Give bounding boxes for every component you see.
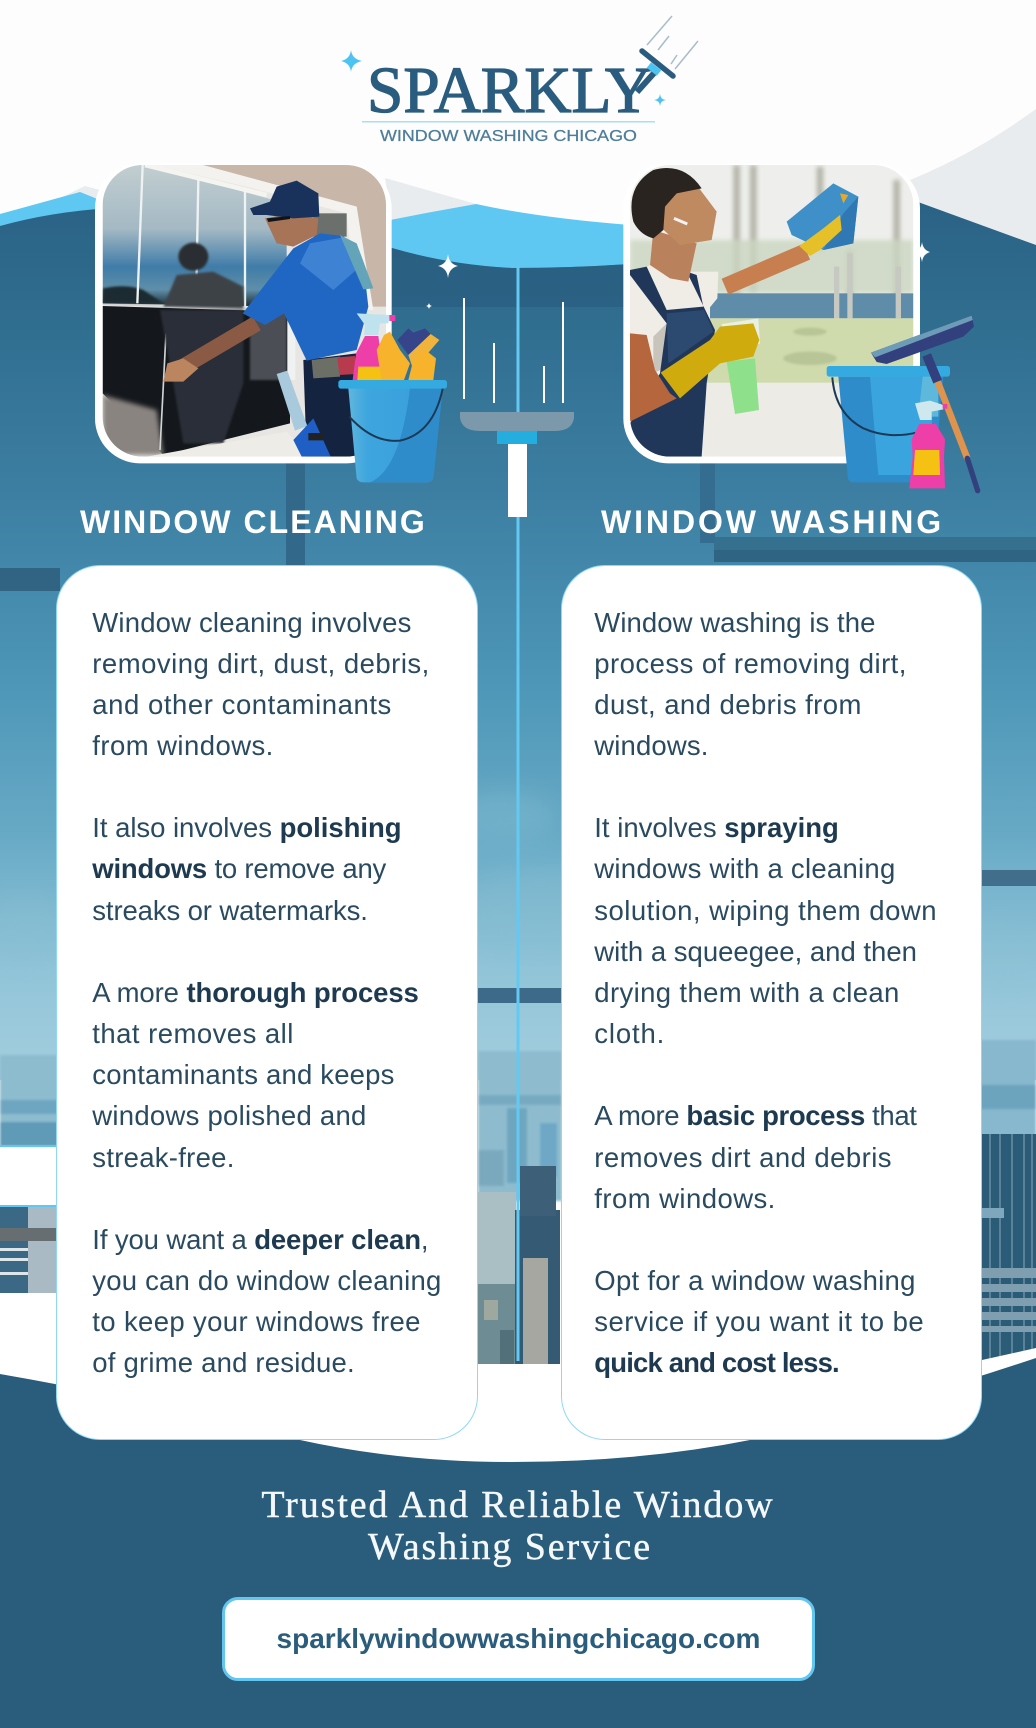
- text block: window cleaning description: streak-free.: [92, 1142, 235, 1173]
- text block: window cleaning description: It also involves polishing: [92, 812, 401, 843]
- raised arm: [725, 252, 807, 287]
- text block: window washing description: solution, wiping them down: [594, 895, 937, 926]
- logo: [341, 16, 698, 145]
- text block: window cleaning description: Window cleaning involves: [92, 606, 412, 638]
- roller tool: [277, 371, 307, 431]
- pants: [303, 353, 357, 457]
- text block: window washing description: windows.: [594, 730, 709, 761]
- text block: window cleaning description: removing dirt, dust, debris,: [92, 648, 430, 679]
- text block: window cleaning description: to keep your windows free: [92, 1306, 421, 1337]
- bib: [667, 310, 713, 363]
- icon: bucket with cleaning supplies: [338, 313, 447, 482]
- text block: window cleaning description: If you want a deeper clean,: [92, 1224, 428, 1255]
- footer heading: Washing Service: [368, 1526, 652, 1568]
- tool belt: [312, 357, 340, 378]
- heading: window cleaning: WINDOW CLEANING: [80, 504, 427, 540]
- text block: window washing description: quick and cost less.: [594, 1347, 839, 1378]
- logo wordmark: SPARKLY: [367, 54, 652, 127]
- footer heading: [261, 1484, 775, 1568]
- text block: window washing description: [594, 606, 937, 1378]
- text block: window cleaning description: windows to remove any: [92, 853, 386, 884]
- ground: [706, 382, 839, 384]
- center squeegee: [460, 298, 574, 517]
- text block: window cleaning description: of grime and residue.: [92, 1347, 355, 1378]
- text block: window cleaning description: streaks or watermarks.: [92, 895, 368, 926]
- text block: window washing description: Window washing is the: [594, 606, 875, 638]
- text block: window washing description: drying them with a clean: [594, 977, 900, 1008]
- panel: window cleaning card: [56, 565, 478, 1440]
- overalls: [630, 267, 715, 457]
- dark footer background: [0, 1358, 1036, 1728]
- arm: [183, 323, 257, 367]
- neck and head: [650, 230, 697, 282]
- text block: window cleaning description: windows polished and: [92, 1100, 367, 1131]
- photo: worker cleaning window: [95, 163, 392, 463]
- text block: window washing description: Opt for a window washing: [594, 1265, 916, 1296]
- text block: window washing description: with a squeegee, and then: [594, 936, 917, 967]
- lower arm: [630, 333, 677, 422]
- text block: window cleaning description: that removes all: [92, 1018, 294, 1049]
- icon: bucket with squeegee and spray bottle: [827, 316, 978, 491]
- icon: logo squeegee: [637, 16, 698, 92]
- window frame bars: [0, 248, 1036, 1003]
- website button: sparklywindowwashingchicago.com: [277, 1623, 760, 1654]
- clouds: [0, 790, 1036, 990]
- text block: window cleaning description: A more thorough process: [92, 977, 419, 1008]
- footer heading: Trusted And Reliable Window: [261, 1484, 775, 1526]
- photo: woman washing window: [623, 163, 920, 463]
- website button: [222, 1597, 815, 1681]
- text block: window washing description: cloth.: [594, 1018, 665, 1049]
- lower dark pane: [103, 306, 290, 455]
- text block: window washing description: windows with a cleaning: [594, 853, 896, 884]
- icon: logo sparkles: [341, 50, 666, 106]
- logo subtitle: WINDOW WASHING CHICAGO: [380, 128, 637, 145]
- wall: [197, 163, 387, 307]
- center line: [516, 266, 520, 1361]
- window sky background: [0, 202, 1036, 1080]
- fence: [710, 293, 913, 318]
- text block: window cleaning description: you can do window cleaning: [92, 1265, 441, 1296]
- logo rule: [362, 121, 655, 122]
- text block: window cleaning description: from windows.: [92, 730, 274, 761]
- shirt: [630, 265, 718, 308]
- head: [265, 213, 318, 247]
- reflection silhouette: [160, 243, 243, 443]
- text block: window cleaning description: contaminants and keeps: [92, 1059, 395, 1090]
- text block: window washing description: It involves spraying: [594, 812, 839, 843]
- text block: window washing description: process of removing dirt,: [594, 648, 907, 679]
- strap: [340, 235, 373, 289]
- light blue swoosh: [0, 192, 630, 275]
- text block: window washing description: A more basic process that: [594, 1100, 917, 1131]
- text block: window washing description: dust, and debris from: [594, 689, 862, 720]
- glove: [661, 323, 759, 398]
- panel: window washing card: [561, 565, 982, 1440]
- text block: window washing description: service if you want it to be: [594, 1306, 924, 1337]
- city skyline: [0, 1040, 1036, 1364]
- cloth: [787, 183, 858, 250]
- text block: window cleaning description: [92, 606, 441, 1378]
- white swoosh base: [0, 1293, 1036, 1500]
- shirt: [243, 233, 368, 361]
- left white strip and building: [0, 1145, 60, 1293]
- text block: window washing description: from windows.: [594, 1183, 776, 1214]
- gray swoosh: [62, 109, 1036, 260]
- lawn: [707, 318, 913, 383]
- text block: window cleaning description: and other contaminants: [92, 689, 392, 720]
- sparkles: [426, 242, 930, 309]
- frame by worker: [287, 313, 295, 380]
- text block: window washing description: removes dirt and debris: [594, 1142, 892, 1173]
- trees: [630, 165, 913, 320]
- heading: window washing: WINDOW WASHING: [601, 504, 944, 540]
- bottle: [722, 318, 760, 344]
- sill: [148, 442, 226, 456]
